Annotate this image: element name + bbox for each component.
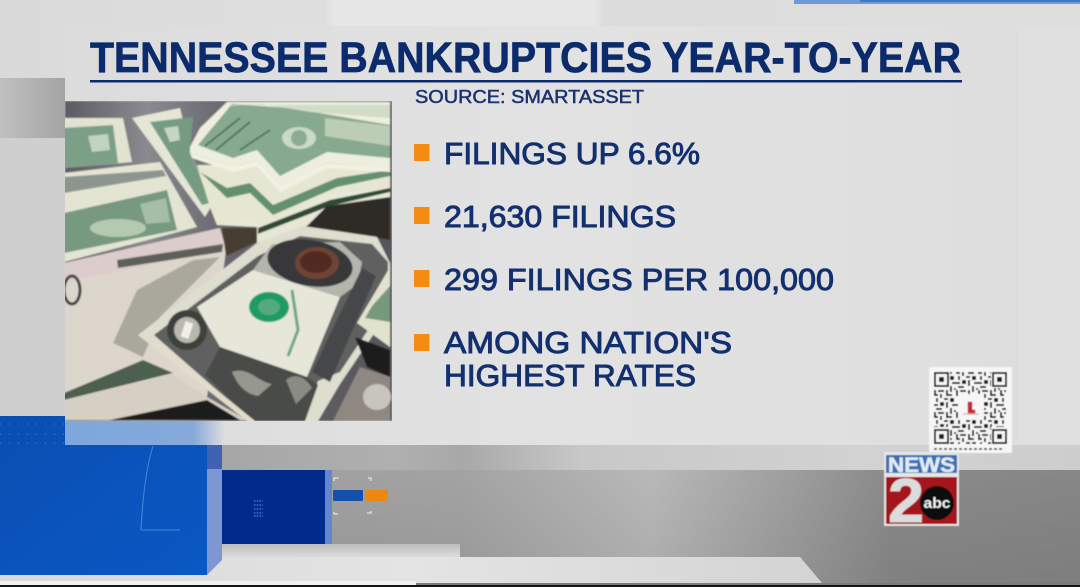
top left bill xyxy=(64,118,132,168)
bullet: among highest: AMONG NATION'S xyxy=(444,325,732,360)
large faded five xyxy=(65,228,227,399)
dark blue screen and lower-third bug xyxy=(222,470,388,544)
one dollar bill xyxy=(138,226,390,421)
left green bill xyxy=(64,162,197,262)
News 2 abc station logo: 2 xyxy=(888,467,924,536)
crumpled stack lowest layer xyxy=(217,186,391,228)
tall bill xyxy=(132,108,212,217)
crumpled stack top layer xyxy=(190,102,390,187)
title: TENNESSEE BANKRUPTCIES YEAR-TO-YEAR xyxy=(90,35,961,82)
News 2 abc station logo: NEWS xyxy=(888,454,955,477)
main panel xyxy=(65,26,1018,445)
crumpled stack third layer xyxy=(196,164,392,218)
title underline xyxy=(90,80,962,82)
News 2 abc station logo: abc xyxy=(924,496,950,512)
blue studio block xyxy=(0,416,222,575)
bullet: per capita: 299 FILINGS PER 100,000 xyxy=(444,262,834,297)
source line: SOURCE: SMARTASSET xyxy=(415,86,644,107)
bullet: filings up: FILINGS UP 6.6% xyxy=(444,136,700,171)
right edge bills xyxy=(357,267,390,347)
News 2 abc station logo xyxy=(884,452,959,536)
bullet icon xyxy=(414,144,430,161)
bullet icon xyxy=(414,334,430,351)
bullet: total filings: 21,630 FILINGS xyxy=(444,199,676,234)
bullet: among highest: HIGHEST RATES xyxy=(444,358,696,393)
QR code xyxy=(929,367,1012,453)
bullet icon xyxy=(414,207,430,224)
bullet: among highest xyxy=(414,325,732,393)
photo: crumpled dollar bills xyxy=(64,101,392,421)
bullet icon xyxy=(414,270,430,287)
dark gap behind the one dollar bill xyxy=(222,228,257,256)
